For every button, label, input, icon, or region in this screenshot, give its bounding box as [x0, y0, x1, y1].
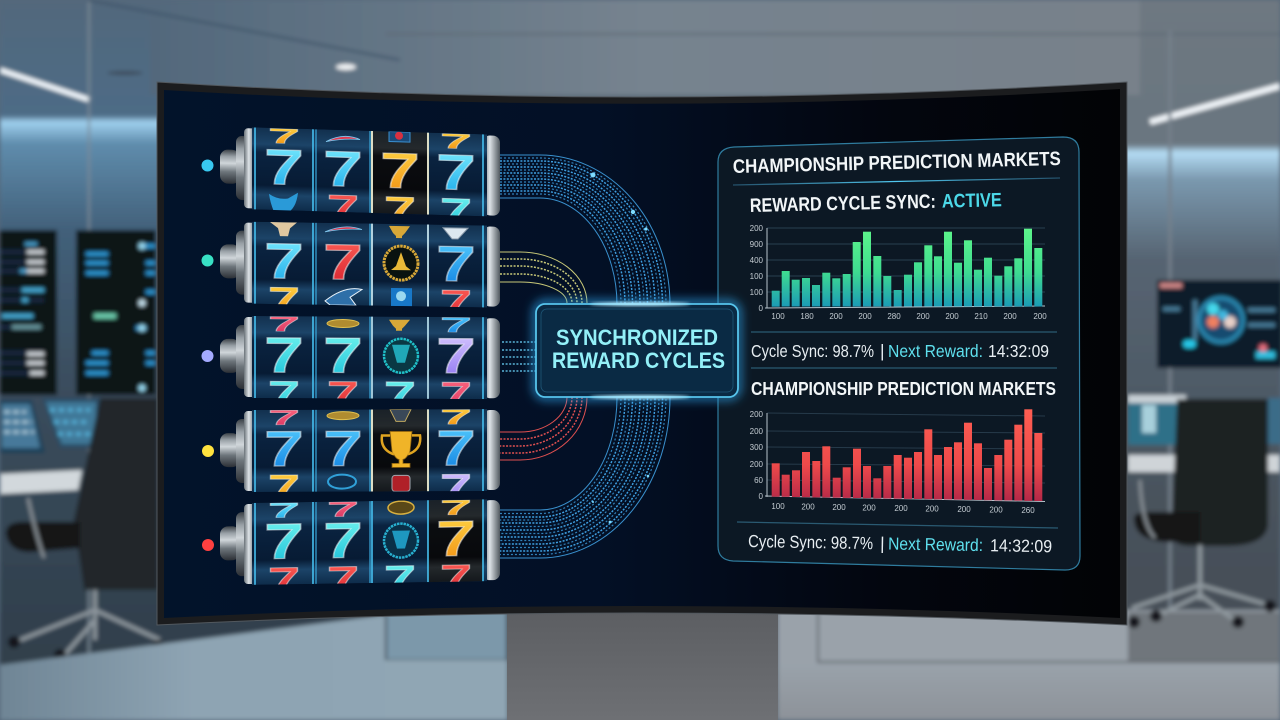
- slot reel 2: 7: [440, 283, 472, 324]
- icon: gold trophy: [382, 431, 420, 467]
- reward cycle sync heading: REWARD CYCLE SYNC:: [750, 191, 936, 217]
- short stream from reel three: [502, 342, 537, 371]
- green bar chart: 200: [829, 312, 843, 321]
- stream particles: [590, 172, 649, 523]
- red stream from reel four: [500, 397, 587, 460]
- green bar chart: 200: [858, 312, 872, 321]
- slot reel 5: 7: [327, 560, 359, 600]
- red bar chart: 200: [925, 504, 939, 514]
- slot reel 1: 7: [384, 190, 416, 231]
- red bar chart: 0: [759, 492, 764, 501]
- right desk and chair: [1128, 395, 1280, 628]
- slot reel 3: 7: [384, 375, 416, 415]
- status line 1: Next Reward:: [888, 341, 983, 361]
- green bar chart: 0: [759, 304, 764, 313]
- yellow stream from reel two: [500, 252, 587, 303]
- red bar chart: 60: [754, 476, 764, 485]
- left server panels: [0, 230, 156, 395]
- monitor bezel: [157, 82, 1127, 625]
- red bar chart: 200: [801, 502, 815, 512]
- green bar chart: 400: [750, 256, 764, 265]
- status line 1: 14:32:09: [988, 341, 1049, 361]
- slot reel 3: 7: [268, 375, 300, 415]
- slot reel 3: 7: [264, 327, 304, 384]
- green bar chart: 210: [974, 312, 988, 321]
- green bar chart: 100: [750, 288, 764, 297]
- slot reel 1: 7: [436, 144, 476, 201]
- green bar chart: 280: [887, 312, 901, 321]
- center wall panel and floor: [386, 610, 507, 660]
- slot reel 5: 7: [327, 498, 359, 522]
- panel: championship prediction markets: [718, 137, 1080, 570]
- slot reel 2: [220, 222, 500, 308]
- slot reel 1: 7: [327, 188, 359, 229]
- slot reel 5: 7: [323, 512, 363, 569]
- green bar chart: 200: [916, 312, 930, 321]
- slot reel 3: 7: [440, 314, 472, 337]
- slot reel 4: 7: [440, 406, 472, 429]
- slot reel 4: [220, 409, 500, 492]
- slot reel 5: 7: [436, 511, 476, 567]
- slot reel 5: 7: [268, 499, 300, 523]
- monitor screen: [164, 89, 1120, 618]
- red bar chart: 200: [832, 503, 846, 512]
- slot reel 1: 7: [380, 142, 420, 200]
- red bar chart: [750, 409, 1045, 515]
- slot reel 3: [220, 316, 500, 400]
- green bar chart: 900: [750, 240, 764, 249]
- curved monitor: [157, 82, 1127, 625]
- slot reel 5: 7: [384, 559, 416, 599]
- slot reel 3: 7: [436, 328, 476, 385]
- slot reel 4: 7: [440, 468, 472, 507]
- red bar chart: 300: [750, 443, 764, 452]
- slot reel 1: [220, 127, 500, 216]
- status line 2: 14:32:09: [990, 535, 1052, 556]
- slot reel 1: 7: [323, 141, 363, 198]
- slot reel 5: 7: [264, 513, 304, 570]
- slot reel 4: 7: [268, 468, 300, 508]
- slot reel 5: 7: [268, 561, 300, 601]
- status line 2: Next Reward:: [888, 533, 983, 555]
- slot reel 2: 7: [323, 234, 363, 291]
- green bar chart: 180: [800, 312, 814, 321]
- hub label: SYNCHRONIZED: [556, 325, 718, 350]
- slot reel 3: 7: [327, 375, 359, 415]
- slot reel 3: 7: [440, 375, 472, 415]
- red bar chart: 100: [771, 502, 785, 511]
- slot reel 2: 7: [436, 236, 476, 293]
- status line 1: Cycle Sync: 98.7%: [751, 341, 874, 361]
- status line 1: |: [880, 341, 885, 361]
- slot reel 5: 7: [440, 558, 472, 598]
- slot reel 1: 7: [268, 124, 300, 149]
- reward cycle sync heading: ACTIVE: [942, 189, 1002, 213]
- slot reel 4: 7: [268, 406, 300, 430]
- status dot 5: [202, 539, 214, 551]
- slot reel 1: 7: [440, 130, 472, 154]
- monitor stand: [507, 600, 778, 720]
- green bar chart: 200: [945, 312, 959, 321]
- slot reel 4: 7: [436, 420, 476, 477]
- green bar chart: 100: [750, 272, 764, 281]
- slot reel 5: 7: [440, 496, 472, 520]
- central hub: synchronized reward cycles: [536, 302, 738, 399]
- slot reel 4: 7: [323, 421, 363, 477]
- slot reel 1: 7: [264, 139, 304, 196]
- red bar chart: 200: [750, 460, 764, 469]
- slot reel 2: 7: [264, 233, 304, 290]
- panel heading: CHAMPIONSHIP PREDICTION MARKETS: [733, 148, 1061, 178]
- red bar chart: 200: [957, 505, 971, 514]
- second heading: CHAMPIONSHIP PREDICTION MARKETS: [751, 378, 1056, 399]
- red bar chart: 200: [750, 427, 764, 436]
- status dot 2: [202, 254, 214, 266]
- left floor: [0, 615, 385, 720]
- status line 2: Cycle Sync: 98.7%: [748, 531, 873, 553]
- green bar chart: 200: [750, 224, 764, 233]
- slot reel 3: 7: [268, 313, 300, 336]
- red bar chart: 200: [894, 504, 908, 513]
- green bar chart: 200: [1003, 312, 1017, 321]
- hub label: REWARD CYCLES: [552, 348, 725, 373]
- status dot 1: [202, 160, 214, 172]
- slot reel 5: [220, 499, 500, 585]
- data streams connecting reels to hub: [500, 155, 670, 558]
- green bar chart: 200: [1033, 312, 1047, 321]
- slot reel 4: 7: [264, 421, 304, 477]
- left desk with monitors and chair: [0, 398, 164, 661]
- slot reel 2: 7: [268, 280, 300, 321]
- top blue arc bundle: [500, 155, 670, 305]
- right wall monitor: [1157, 280, 1280, 368]
- status dot 4: [202, 445, 214, 457]
- status line 2: |: [880, 533, 885, 553]
- red bar chart: 200: [750, 410, 764, 419]
- green bar chart: 100: [771, 312, 785, 321]
- panel background: [718, 137, 1080, 570]
- green bar chart: [750, 224, 1047, 321]
- bottom blue arc bundle: [500, 395, 670, 558]
- red bar chart: 260: [1021, 506, 1035, 515]
- red bar chart: 200: [989, 506, 1003, 514]
- slot reel 1: 7: [440, 191, 472, 232]
- status dot 3: [202, 350, 214, 362]
- red bar chart: 200: [862, 504, 876, 512]
- slot reel 3: 7: [323, 328, 363, 384]
